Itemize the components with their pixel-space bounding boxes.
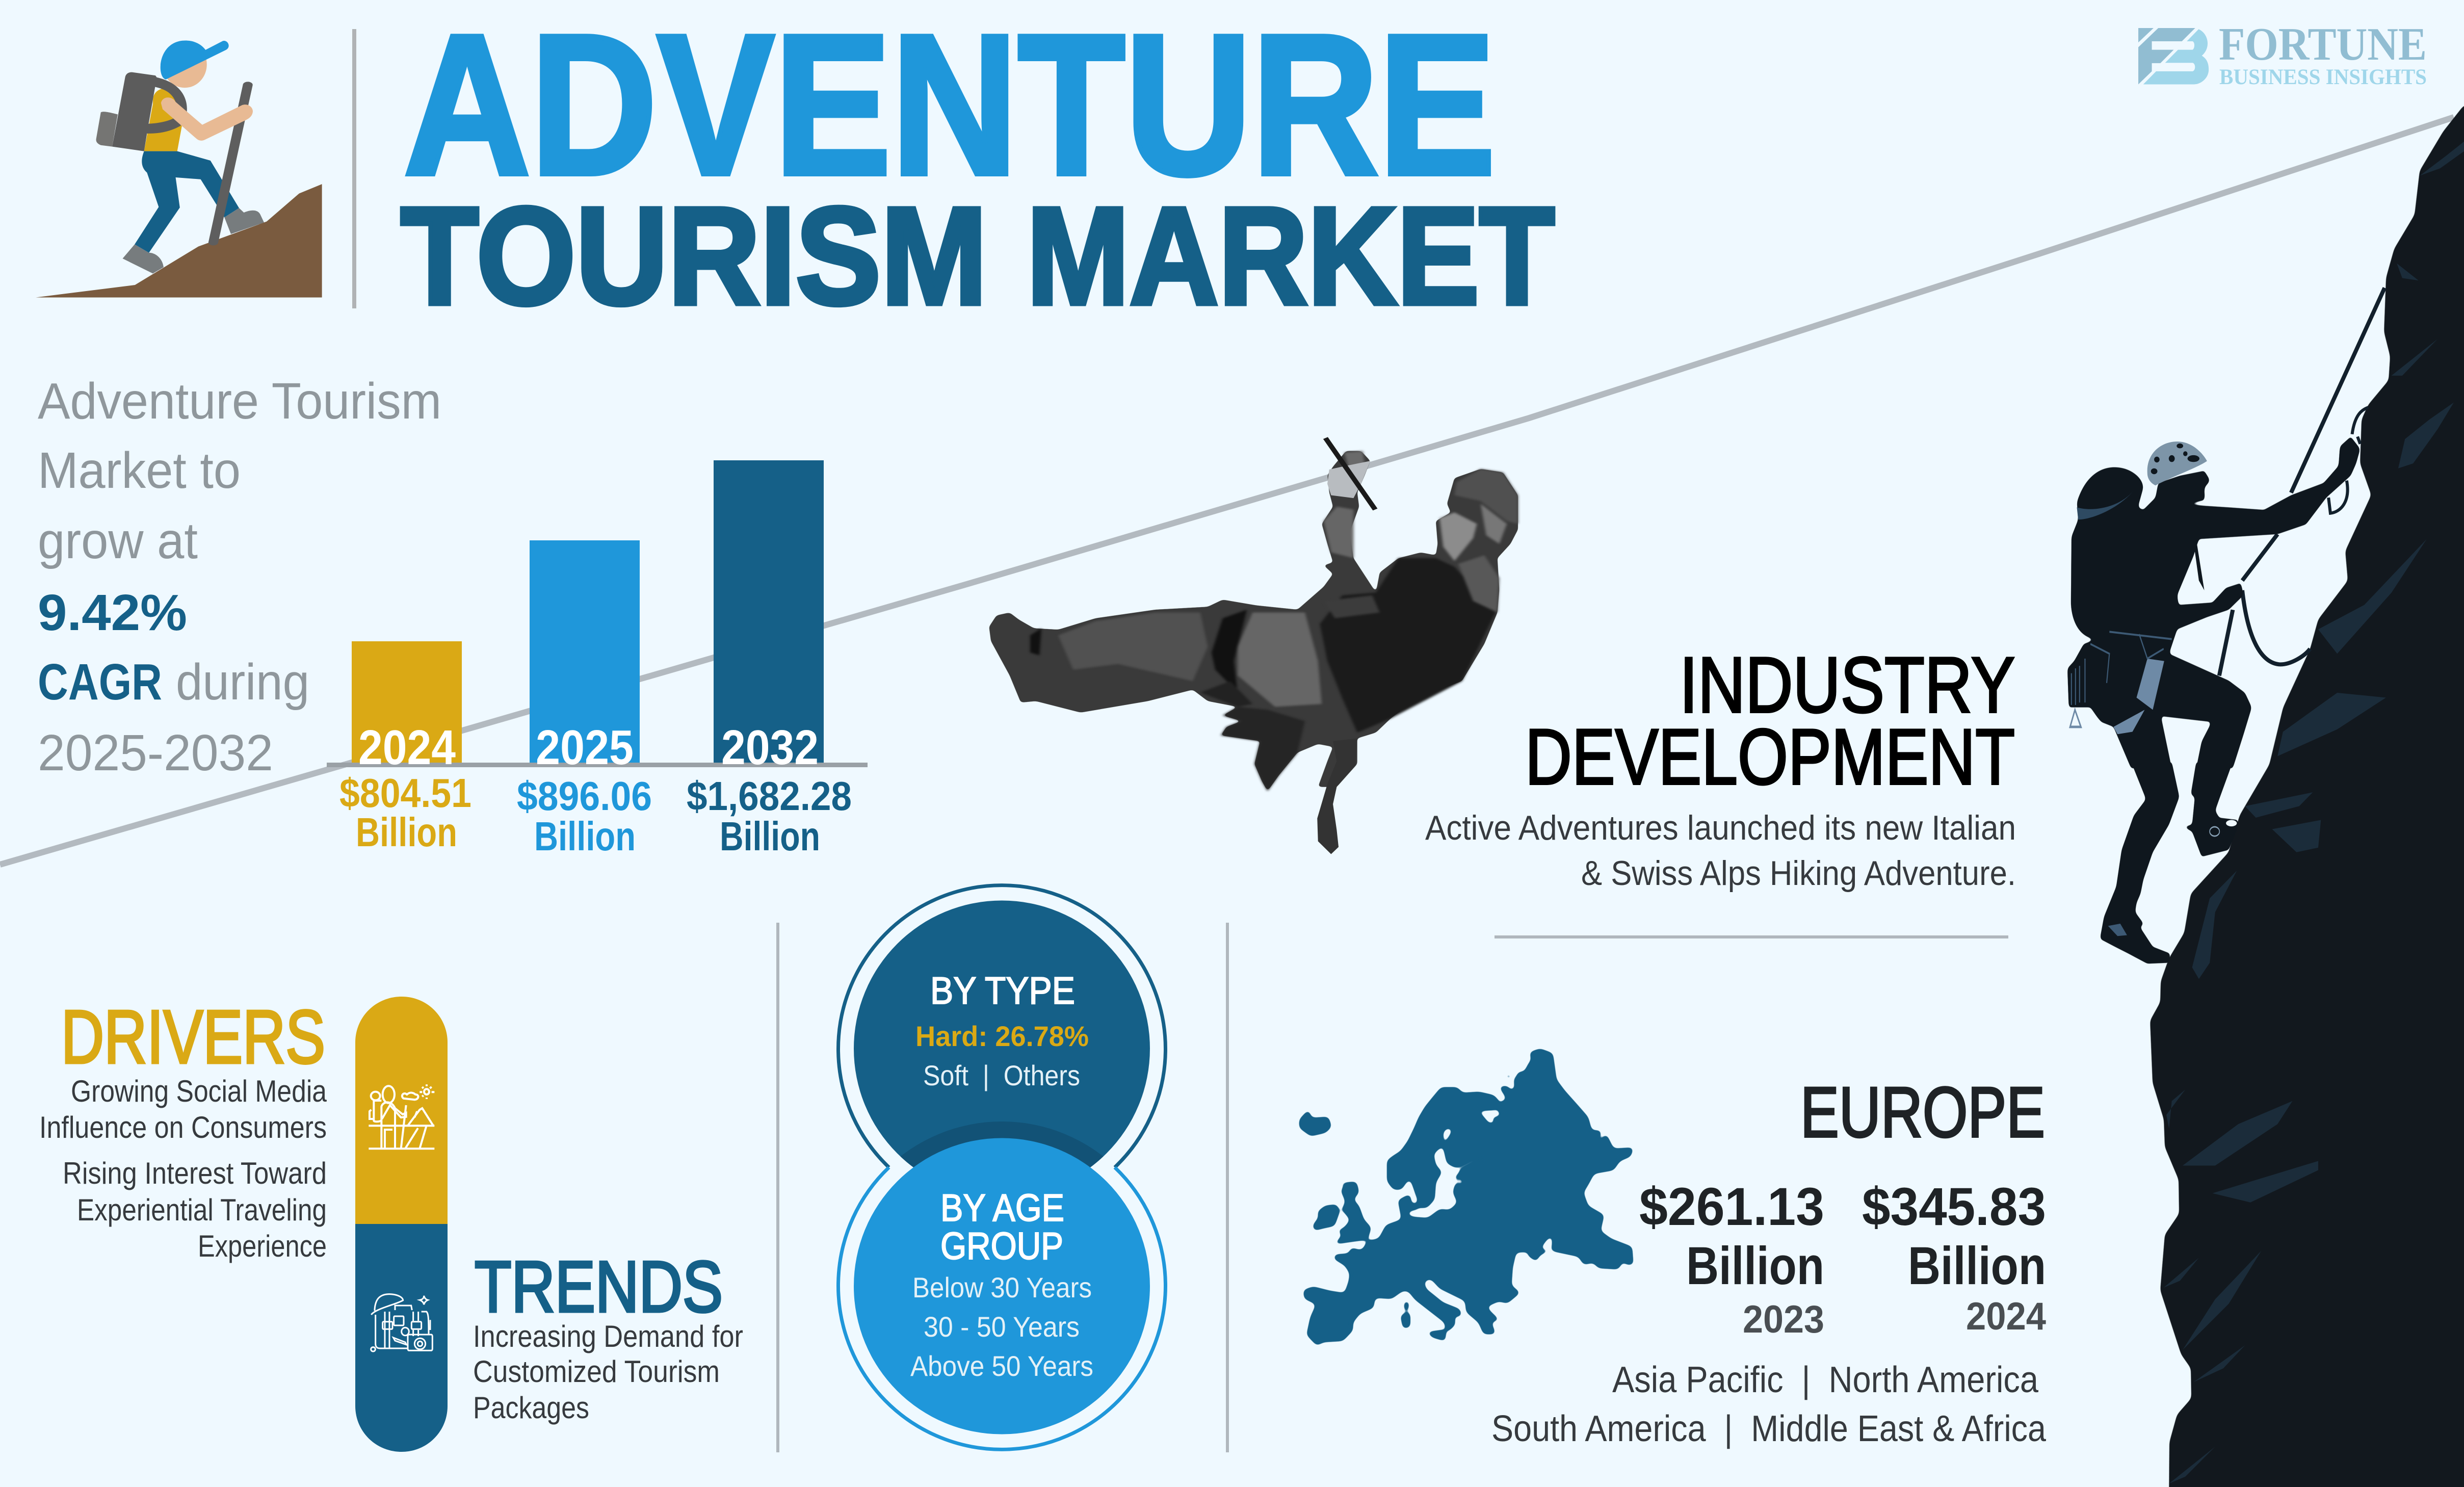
text block: by age group: Below 30 Years (912, 1271, 1092, 1303)
text block: by age group: Above 50 Years (910, 1350, 1093, 1382)
panel: drivers and trends pill (355, 997, 448, 1452)
text block: CAGR statement: Market to (38, 442, 241, 499)
text block: drivers: Experiential Traveling (77, 1193, 327, 1227)
text block: CAGR statement: 9.42% (38, 584, 187, 641)
illustration: rock climber (2067, 288, 2384, 964)
text block: CAGR statement: during (176, 654, 309, 711)
text block: CAGR statement (38, 373, 441, 781)
text block: other regions (1491, 1360, 2047, 1449)
text block: CAGR statement: CAGR (38, 654, 162, 711)
panel: Europe market values (1639, 1072, 2046, 1341)
text block: drivers: Growing Social Media (71, 1074, 327, 1108)
text block: industry development detail: Active Adventures launched its new Italian (1425, 808, 2016, 847)
panel: Europe market values: $345.83 (1862, 1177, 2046, 1237)
icon: suitcase with hat and camera (371, 1294, 432, 1351)
logo: Fortune Business Insights: FORTUNE (2219, 18, 2427, 70)
text block: CAGR statement: grow at (38, 512, 198, 569)
logo: Fortune Business Insights (2138, 18, 2427, 89)
text block: industry development detail: & Swiss Alps Hiking Adventure. (1581, 854, 2016, 893)
panel: Europe market values: Billion (1686, 1236, 1824, 1296)
text block: by type (915, 969, 1089, 1091)
text block: drivers: Influence on Consumers (39, 1110, 327, 1144)
text block: other regions: South America | Middle East & Africa (1491, 1408, 2047, 1449)
panel: segmentation circles (837, 885, 1166, 1451)
bar chart: market size: 2025 (536, 720, 634, 775)
panel: Europe market values: Billion (1908, 1236, 2046, 1296)
text block: other regions: Asia Pacific | North America (1612, 1360, 2039, 1400)
bar chart: market size: Billion (534, 814, 636, 859)
text block: by type: Hard: 26.78% (915, 1020, 1089, 1052)
text block: CAGR statement: 2025-2032 (38, 724, 273, 781)
text block: by age group: BY AGE (940, 1186, 1064, 1229)
text block: drivers: Rising Interest Toward (63, 1156, 327, 1190)
text block: industry development detail (1425, 808, 2016, 893)
heading: industry development (1525, 641, 2015, 801)
text block: trends (473, 1319, 743, 1425)
bar chart: market size: Billion (356, 810, 457, 855)
header divider (352, 29, 356, 308)
text block: by age group (910, 1186, 1093, 1382)
illustration: zipliner (989, 438, 1518, 854)
text block: trends: Packages (473, 1391, 589, 1425)
panel: Europe market values: 2024 (1966, 1295, 2046, 1338)
panel: Europe market values: $261.13 (1639, 1177, 1824, 1237)
bar chart: market size: $1,682.28 (687, 773, 852, 819)
map: Europe (1300, 1049, 1633, 1345)
title: TOURISM (401, 178, 987, 333)
title: ADVENTURE (404, 0, 1496, 217)
icon: traveller with mountains (369, 1084, 434, 1149)
bar chart: market size: $896.06 (517, 773, 652, 819)
text block: CAGR statement: Adventure Tourism (38, 373, 441, 430)
circle: by type (854, 900, 1150, 1197)
logo: Fortune Business Insights: BUSINESS INSIGHTS (2219, 65, 2427, 89)
heading: industry development: INDUSTRY (1680, 641, 2015, 729)
icon: hiker on hill (36, 41, 322, 297)
bar chart: market size: 2024 (358, 720, 456, 775)
heading: drivers: DRIVERS (61, 995, 325, 1079)
illustration: rock face (2150, 105, 2464, 1487)
heading: industry development: DEVELOPMENT (1525, 713, 2015, 801)
circle: by age group (854, 1138, 1150, 1434)
panel: Europe market values: EUROPE (1800, 1072, 2045, 1152)
text block: drivers (39, 1074, 327, 1263)
text block: drivers: Experience (198, 1229, 327, 1263)
title (401, 0, 1555, 333)
text block: by type: Soft | Others (923, 1059, 1080, 1091)
text block: by age group: 30 - 50 Years (924, 1311, 1080, 1343)
text block: trends: Customized Tourism (473, 1354, 720, 1389)
bar chart: market size: 2032 (721, 720, 819, 775)
text block: trends: Increasing Demand for (473, 1319, 743, 1353)
bar chart: market size: Billion (720, 814, 820, 859)
bar chart: market size: $804.51 (339, 770, 471, 816)
bar chart: market size (327, 460, 868, 859)
text block: by age group: GROUP (940, 1224, 1063, 1267)
title: MARKET (1027, 178, 1555, 333)
text block: by type: BY TYPE (930, 969, 1075, 1012)
heading: trends: TRENDS (475, 1246, 723, 1327)
panel: Europe market values: 2023 (1743, 1298, 1824, 1341)
